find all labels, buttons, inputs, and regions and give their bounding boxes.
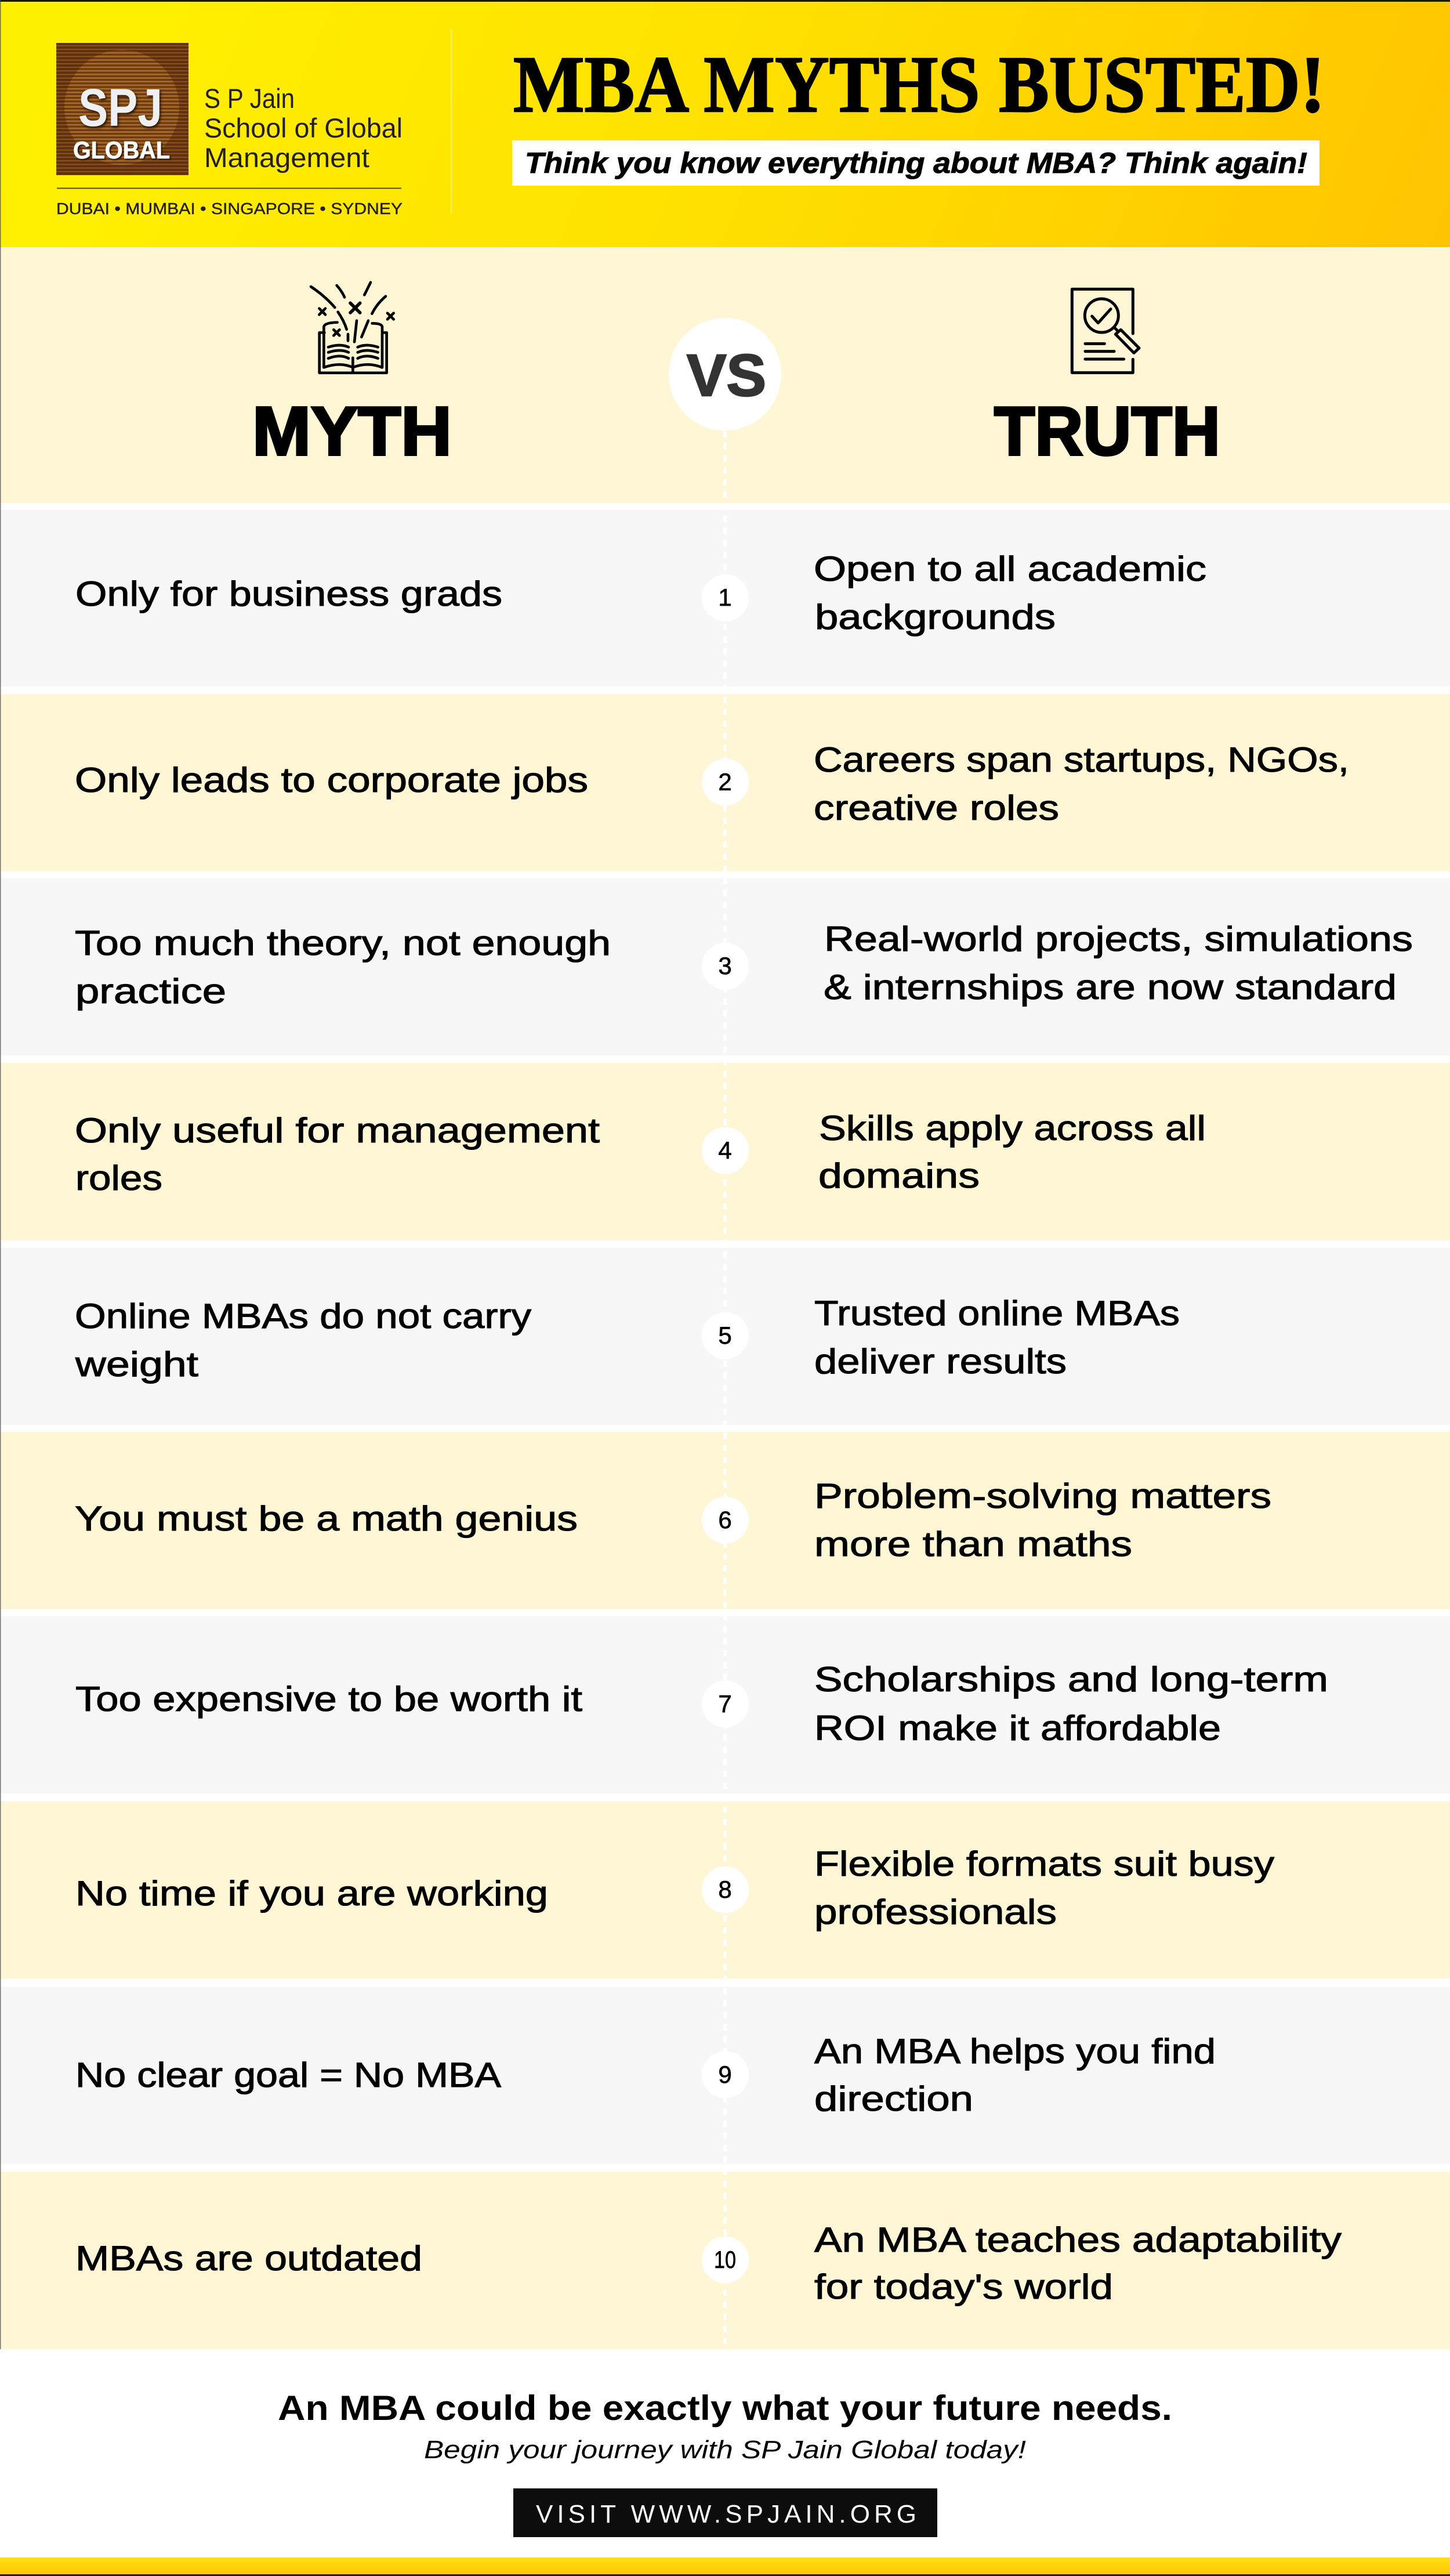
row 2: creative roles xyxy=(814,788,1059,827)
row 3: Too much theory, not enough xyxy=(75,924,611,963)
row 8 xyxy=(0,1801,1450,1978)
heading: TRUTH: TRUTH xyxy=(994,393,1220,470)
logo: SPJ Global badge: SPJ xyxy=(78,78,162,138)
VS badge xyxy=(669,318,781,430)
row 10 xyxy=(0,2172,1450,2349)
row 7: Scholarships and long-term xyxy=(814,1660,1328,1699)
number badge 4: 4 xyxy=(718,1137,732,1164)
VS badge: VS xyxy=(687,342,766,408)
school name: School of Global xyxy=(204,113,403,143)
closing message xyxy=(278,2389,1172,2464)
logo: SPJ Global badge xyxy=(56,43,188,175)
row 4 xyxy=(0,1063,1450,1240)
number badge 6 xyxy=(702,1497,749,1543)
row 5: Online MBAs do not carry xyxy=(75,1297,531,1336)
heading: MYTH: MYTH xyxy=(252,393,452,470)
number badge 2 xyxy=(702,759,749,805)
number badge 9: 9 xyxy=(718,2061,732,2088)
row 9: An MBA helps you find xyxy=(814,2032,1216,2071)
row 10: MBAs are outdated xyxy=(75,2239,422,2278)
row 9: direction xyxy=(814,2079,973,2118)
school name xyxy=(204,83,403,173)
row 4: domains xyxy=(818,1156,980,1195)
row 9: No clear goal = No MBA xyxy=(75,2056,501,2094)
number badge 7 xyxy=(702,1680,749,1728)
title: MBA MYTHS BUSTED! xyxy=(513,40,1325,129)
number badge 3 xyxy=(702,943,749,990)
row 10: An MBA teaches adaptability xyxy=(814,2220,1342,2259)
row 5: weight xyxy=(75,1345,198,1384)
number badge 5: 5 xyxy=(718,1322,732,1349)
row 2: Only leads to corporate jobs xyxy=(75,761,588,799)
number badge 9 xyxy=(702,2052,749,2098)
row 1: backgrounds xyxy=(815,598,1056,636)
row 1 xyxy=(0,509,1450,687)
row 3: practice xyxy=(75,972,226,1011)
row 7 xyxy=(0,1616,1450,1794)
row 3: Real-world projects, simulations xyxy=(824,920,1413,958)
row 3 xyxy=(0,878,1450,1056)
header panel xyxy=(0,0,1450,247)
call to action button: VISIT WWW.SPJAIN.ORG xyxy=(536,2500,916,2528)
row 7: Too expensive to be worth it xyxy=(75,1680,582,1718)
row 9 xyxy=(0,1987,1450,2164)
row 6 xyxy=(0,1432,1450,1609)
logo: SPJ Global badge: GLOBAL xyxy=(73,136,170,164)
subtitle strip xyxy=(512,140,1320,186)
row 8: No time if you are working xyxy=(75,1874,548,1913)
row 10: for today's world xyxy=(814,2267,1113,2306)
row 1: Open to all academic xyxy=(814,549,1206,588)
number badge 4 xyxy=(702,1127,749,1174)
closing message: An MBA could be exactly what your future needs. xyxy=(278,2389,1172,2427)
number badge 10: 10 xyxy=(714,2246,736,2273)
icon: document with magnifier xyxy=(1072,289,1139,372)
school name: S P Jain xyxy=(204,83,295,114)
number badge 1: 1 xyxy=(718,584,732,611)
dashed centre line xyxy=(723,431,727,2344)
row 6: You must be a math genius xyxy=(75,1499,578,1538)
number badge 5 xyxy=(702,1312,749,1359)
column heading panel xyxy=(0,247,1450,503)
row 2: Careers span startups, NGOs, xyxy=(814,740,1349,779)
row 8: professionals xyxy=(814,1893,1057,1931)
campus locations: DUBAI • MUMBAI • SINGAPORE • SYDNEY xyxy=(56,200,403,218)
row 1: Only for business grads xyxy=(75,574,502,613)
row 4: roles xyxy=(75,1159,162,1197)
row 7: ROI make it affordable xyxy=(814,1709,1221,1748)
row 2 xyxy=(0,694,1450,871)
row 3: & internships are now standard xyxy=(824,968,1397,1007)
call to action button xyxy=(513,2488,937,2537)
number badge 8: 8 xyxy=(718,1876,732,1903)
bottom bar xyxy=(0,2557,1450,2576)
number badge 1 xyxy=(702,574,749,621)
closing message: Begin your journey with SP Jain Global today! xyxy=(424,2436,1026,2464)
number badge 10 xyxy=(702,2236,749,2284)
number badge 8 xyxy=(702,1866,749,1913)
row 4: Only useful for management xyxy=(75,1111,600,1150)
row 6: Problem-solving matters xyxy=(814,1477,1271,1515)
row 6: more than maths xyxy=(814,1525,1132,1564)
number badge 3: 3 xyxy=(718,952,732,979)
row 5 xyxy=(0,1247,1450,1425)
row 5: Trusted online MBAs xyxy=(814,1294,1180,1333)
number badge 6: 6 xyxy=(718,1506,732,1533)
subtitle strip: Think you know everything about MBA? Think again! xyxy=(525,147,1307,179)
row 4: Skills apply across all xyxy=(819,1109,1206,1148)
row 8: Flexible formats suit busy xyxy=(814,1844,1274,1883)
number badge 7: 7 xyxy=(718,1690,732,1717)
number badge 2: 2 xyxy=(718,768,732,795)
school name: Management xyxy=(204,142,369,173)
icon: open book with sparks xyxy=(311,283,394,373)
row 5: deliver results xyxy=(814,1342,1067,1381)
